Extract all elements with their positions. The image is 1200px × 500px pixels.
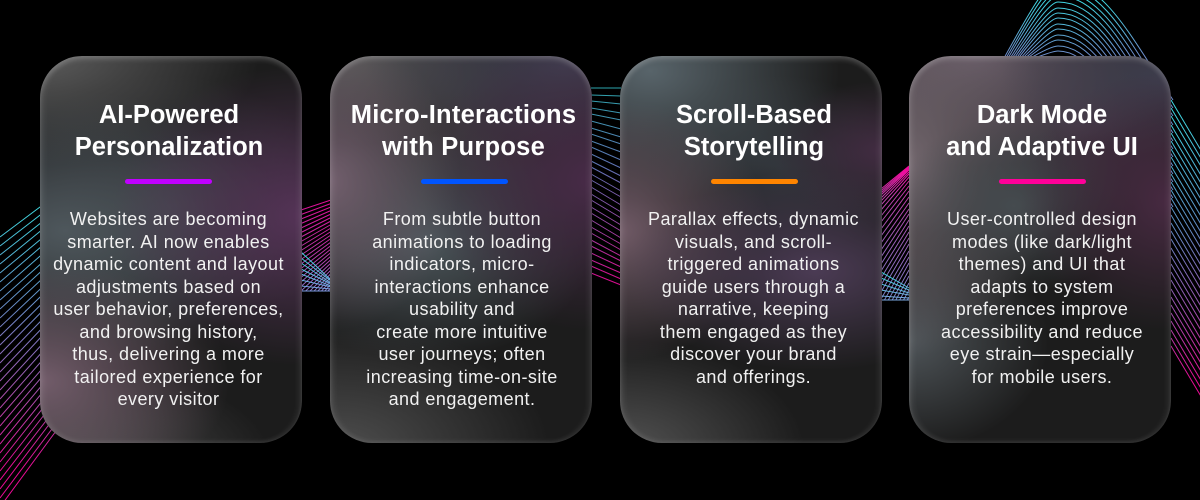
text: micro-interactions description: user journeys; often	[378, 344, 546, 364]
heading: Scroll-Based Storytelling: Storytelling	[684, 133, 824, 161]
pink accent bar	[999, 179, 1086, 184]
text: personalization description: smarter. AI now enables	[67, 232, 270, 252]
heading: Micro-Interactions with Purpose: with Purpose	[382, 133, 545, 161]
panel: Scroll-Based Storytelling	[620, 56, 882, 443]
text: personalization description	[53, 209, 284, 409]
text: micro-interactions description	[366, 209, 558, 409]
text: personalization description: thus, delivering a more	[72, 344, 265, 364]
text: micro-interactions description: animations to loading	[372, 232, 552, 252]
text: dark mode description: themes) and UI that	[959, 254, 1125, 274]
text: personalization description: dynamic content and layout	[53, 254, 284, 274]
text: micro-interactions description: create more intuitive	[376, 322, 548, 342]
text: scroll storytelling description: discover your brand	[670, 344, 837, 364]
text: personalization description: user behavior, preferences,	[53, 299, 284, 319]
text: dark mode description: for mobile users.	[972, 366, 1112, 386]
text: dark mode description: User-controlled design	[947, 209, 1137, 229]
heading: Dark Mode and Adaptive UI: and Adaptive UI	[946, 133, 1138, 161]
text: micro-interactions description: From subtle button	[383, 209, 541, 229]
wave: right edge lines	[1171, 100, 1200, 398]
text: personalization description: tailored experience for	[74, 366, 263, 386]
text: scroll storytelling description: them engaged as they	[660, 322, 847, 342]
text: personalization description: adjustments based on	[76, 276, 261, 296]
text: scroll storytelling description: triggered animations	[667, 254, 840, 274]
text: micro-interactions description: usability and	[409, 299, 515, 319]
heading: AI-Powered Personalization: Personalization	[75, 133, 263, 161]
text: scroll storytelling description: guide users through a	[662, 276, 845, 296]
panel: Dark Mode and Adaptive UI	[909, 56, 1171, 443]
heading: Micro-Interactions with Purpose	[351, 101, 576, 161]
text: dark mode description: accessibility and reduce	[941, 322, 1143, 342]
orange accent bar	[711, 179, 798, 184]
text: dark mode description	[941, 209, 1143, 386]
text: dark mode description: modes (like dark/light	[952, 232, 1132, 252]
purple accent bar	[125, 179, 212, 184]
text: micro-interactions description: indicators, micro-	[389, 254, 535, 274]
text: personalization description: every visitor	[118, 389, 219, 409]
heading: Scroll-Based Storytelling	[676, 101, 832, 161]
wave: gap between cards three and four	[882, 166, 909, 300]
heading: Micro-Interactions with Purpose: Micro-Interactions	[351, 101, 576, 129]
blue accent bar	[421, 179, 508, 184]
text: dark mode description: adapts to system	[970, 276, 1114, 296]
heading: AI-Powered Personalization	[75, 101, 263, 161]
text: personalization description: Websites are becoming	[70, 209, 267, 229]
panel: AI-Powered Personalization	[40, 56, 302, 443]
heading: Dark Mode and Adaptive UI: Dark Mode	[977, 101, 1107, 129]
text: scroll storytelling description: Parallax effects, dynamic	[648, 209, 859, 229]
wave: gap between cards one and two	[302, 200, 330, 292]
wave: peak behind card four	[1003, 0, 1173, 207]
wave: gap between cards two and three	[591, 88, 621, 285]
heading: AI-Powered Personalization: AI-Powered	[99, 101, 239, 129]
text: micro-interactions description: interactions enhance	[374, 276, 550, 296]
heading: Dark Mode and Adaptive UI	[946, 101, 1138, 161]
text: dark mode description: preferences improve	[956, 299, 1128, 319]
text: personalization description: and browsing history,	[79, 322, 258, 342]
text: scroll storytelling description: visuals, and scroll-	[675, 232, 832, 252]
text: micro-interactions description: and engagement.	[389, 389, 535, 409]
text: scroll storytelling description: narrative, keeping	[678, 299, 829, 319]
heading: Scroll-Based Storytelling: Scroll-Based	[676, 101, 832, 129]
text: scroll storytelling description	[648, 209, 859, 387]
panel: Micro-Interactions with Purpose	[330, 56, 592, 443]
text: scroll storytelling description: and offerings.	[696, 366, 811, 386]
text: dark mode description: eye strain—especially	[950, 344, 1134, 364]
text: micro-interactions description: increasing time-on-site	[366, 366, 558, 386]
wave: left edge lines	[0, 184, 70, 500]
